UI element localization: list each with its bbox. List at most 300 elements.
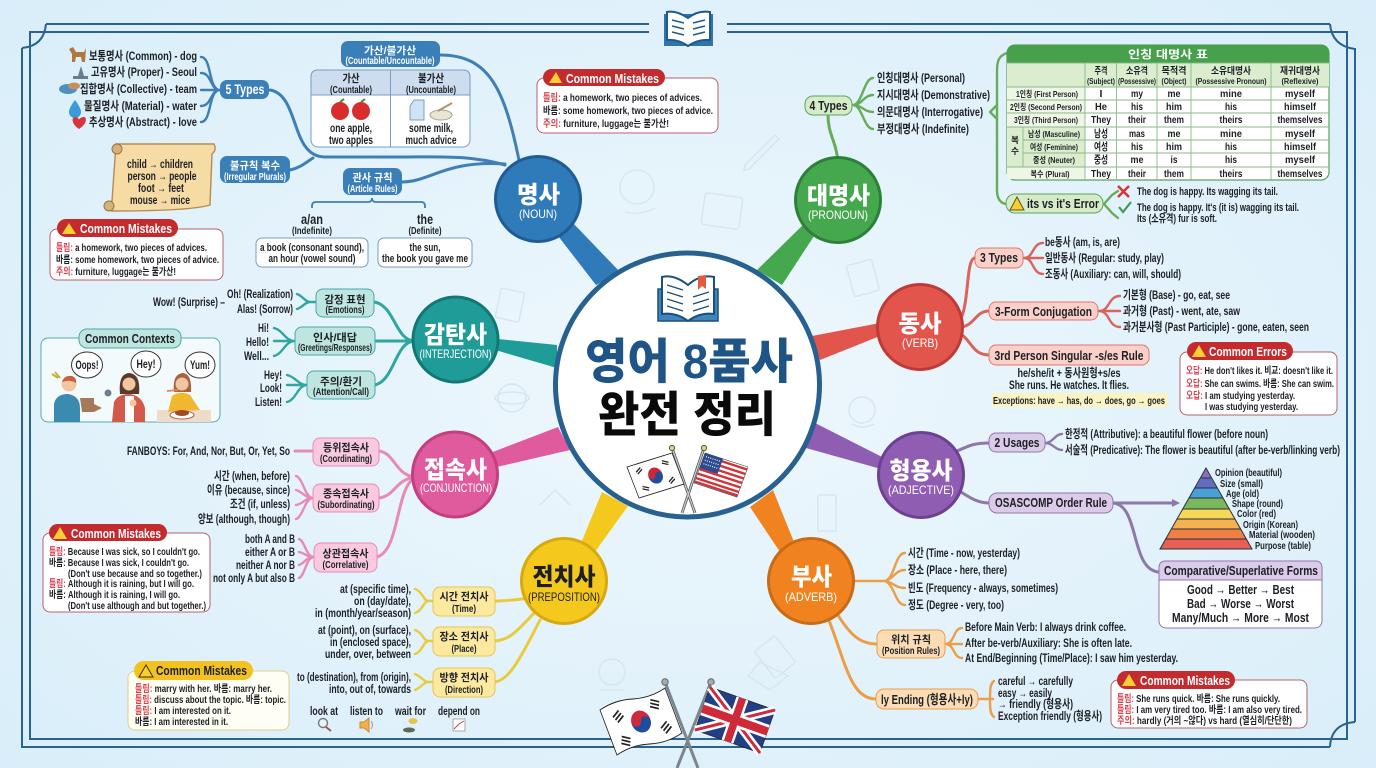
- pill: direction prepositions: (Direction): [445, 685, 483, 696]
- pronoun table values: his: [1131, 141, 1143, 153]
- node: pronoun: [796, 158, 880, 242]
- callout: conjunction common mistakes: 바름: Because I was sick, I couldn't go.: [49, 556, 189, 569]
- its vs it's examples: The dog is happy. Its wagging its tail.: [1137, 186, 1278, 198]
- conjunction examples: neither A nor B: [236, 558, 295, 572]
- pill: coordinating: [313, 438, 379, 466]
- callout: adverb common mistakes: 틀림: I am very tired too. 바름: I am also very tired.: [1117, 703, 1302, 716]
- chart: adjective order pyramid: Origin (Korean): [1243, 519, 1298, 531]
- title line 1: 영어 8품사: [585, 336, 793, 389]
- pill: position rules: [877, 630, 945, 658]
- callout: adverb common mistakes: [1111, 671, 1307, 728]
- pronoun table values: myself: [1285, 128, 1315, 140]
- callout: verb common errors: 오답: He don't likes it. 비교: doesn't like it.: [1186, 364, 1333, 377]
- its vs it's examples: [1104, 186, 1299, 225]
- scroll: irregular plural examples: child → children: [127, 157, 193, 171]
- pronoun table values: me: [1130, 154, 1144, 166]
- table: countable vs uncountable: two apples: [329, 133, 373, 147]
- panel: preposition branches: [128, 582, 540, 732]
- flags: Korea and USA: [627, 445, 748, 513]
- callout: top common mistakes: 바름: some homework, two pieces of advice.: [543, 104, 713, 117]
- conjunction examples: not only A but also B: [213, 571, 295, 585]
- pill: countable / uncountable: (Countable/Uncountable): [346, 56, 434, 67]
- panel: interjection branches: [41, 287, 415, 422]
- pill: subordinating: (Subordinating): [318, 500, 374, 511]
- pill: OSASCOMP: OSASCOMP Order Rule: [995, 495, 1107, 510]
- speech bubble: oops: Oops!: [76, 360, 98, 372]
- pronoun table values: themselves: [1278, 168, 1323, 180]
- pronoun table values: theirs: [1220, 114, 1243, 126]
- callout: top common mistakes: 틀림: a homework, two pieces of advices.: [543, 92, 702, 104]
- preposition examples: at (point), on (surface),: [318, 623, 411, 637]
- pill: irregular plurals: 불규칙 복수: [230, 159, 280, 172]
- node: preposition: 전치사: [532, 564, 596, 591]
- pill: place prepositions: (Place): [452, 644, 476, 655]
- pronoun table values: myself: [1285, 154, 1315, 166]
- chart: adjective order pyramid: Purpose (table): [1255, 540, 1311, 552]
- pronoun table values: him: [1166, 141, 1182, 153]
- article bracket and examples: (Definite): [408, 226, 442, 237]
- callout: verb common errors: 오답: She can swims. 바름: She can swim.: [1186, 377, 1334, 390]
- callout: conjunction common mistakes: 틀림: Although it is raining, but I will go.: [49, 578, 194, 590]
- interjection examples: Look!: [260, 381, 282, 395]
- pronoun type list: [877, 70, 990, 136]
- scroll: irregular plural examples: [104, 144, 215, 211]
- pill: 3-form conjugation: 3-Form Conjugation: [995, 304, 1092, 319]
- pronoun table values: me: [1168, 88, 1181, 100]
- callout: top common mistakes: Common Mistakes: [566, 71, 659, 86]
- chart: adjective order pyramid: Opinion (beautiful): [1215, 467, 1282, 479]
- adverb type list: 정도 (Degree - very, too): [908, 598, 1004, 612]
- conjunction examples: [127, 444, 295, 585]
- conjunction examples: 조건 (if, unless): [230, 497, 290, 511]
- conjunction examples: 양보 (although, though): [198, 512, 290, 526]
- pill: ly ending: [876, 689, 978, 709]
- preposition examples: [297, 582, 411, 696]
- callout: conjunction common mistakes: (Don't use although and but together.): [68, 601, 206, 612]
- pill: direction prepositions: [433, 668, 495, 697]
- noun 5 types list: 물질명사 (Material) - water: [84, 99, 197, 113]
- pronoun table values: my: [1131, 88, 1143, 100]
- conjunction examples: either A or B: [245, 545, 295, 559]
- icon: milk and flour: [410, 100, 452, 120]
- pronoun table values: mas: [1129, 128, 1145, 140]
- adverb position list: [965, 620, 1178, 665]
- callout: conjunction common mistakes: 바름: Although it is raining, I will go.: [49, 588, 180, 601]
- pill: ly ending: ly Ending (형용사+ly): [881, 692, 973, 707]
- node: noun: [496, 156, 580, 242]
- pill: correlative: 상관접속사: [322, 547, 369, 560]
- pill: correlative: (Correlative): [322, 560, 368, 571]
- table: countable vs uncountable: (Uncountable): [406, 85, 456, 96]
- faint background doodles: [495, 135, 880, 690]
- speech bubble: yum: [185, 352, 215, 378]
- table: personal pronouns: 3인칭 (Third Person): [1014, 115, 1078, 125]
- panel: common contexts: [41, 329, 220, 422]
- panel: common contexts: Common Contexts: [85, 331, 175, 346]
- callout: adverb common mistakes: 주의: hardly (거의 ~않다) vs hard (열심히/단단한): [1117, 714, 1292, 727]
- pronoun table values: me: [1168, 128, 1181, 140]
- conjugation list: 기본형 (Base) - go, eat, see: [1123, 287, 1230, 302]
- pronoun table values: themselves: [1278, 114, 1323, 126]
- callout: preposition common mistakes: 틀림: marry with her. 바름: marry her.: [135, 682, 272, 695]
- pill: time prepositions: [433, 587, 495, 616]
- pill: 3 Types: [975, 248, 1023, 268]
- table: personal pronouns: (Object): [1162, 77, 1187, 86]
- interjection examples: Hello!: [246, 335, 269, 349]
- pronoun type list: 부정대명사 (Indefinite): [877, 122, 969, 136]
- pill: 2 Usages: [989, 433, 1045, 452]
- panel: adjective branches: [955, 426, 1340, 628]
- conjunction examples: both A and B: [245, 532, 295, 546]
- pill: 3 Types: 3 Types: [980, 250, 1018, 265]
- chart: adjective order pyramid: Material (wooden): [1249, 529, 1315, 541]
- panel: comparative and superlative forms: [1159, 561, 1322, 628]
- scroll: irregular plural examples: person → people: [128, 169, 197, 183]
- pill: 3rd person singular rule: 3rd Person Singular -s/es Rule: [994, 348, 1144, 363]
- preposition examples: into, out of, towards: [329, 682, 411, 696]
- pronoun table values: himself: [1284, 101, 1316, 113]
- 3rd person rule text: She runs. He watches. It flies.: [1009, 378, 1129, 392]
- callout: verb common errors: I was studying yesterday.: [1205, 402, 1298, 413]
- node: verb: (VERB): [902, 336, 938, 350]
- table: personal pronouns: 남성 (Masculine): [1028, 129, 1080, 139]
- panel: noun branches: [50, 41, 520, 280]
- callout: preposition common mistakes: 틀림: discuss about the topic. 바름: topic.: [135, 693, 286, 706]
- adverb position list: Before Main Verb: I always drink coffee.: [965, 620, 1126, 634]
- article bracket and examples: a/an: [301, 212, 323, 227]
- interjection examples: Well...: [244, 349, 269, 363]
- speech bubble: yum: Yum!: [190, 360, 210, 372]
- callout: verb common errors: Common Errors: [1209, 344, 1287, 359]
- pill: irregular plurals: [220, 156, 290, 183]
- pronoun table values: his: [1225, 141, 1237, 153]
- node: adverb: 부사: [791, 564, 832, 591]
- adverb position list: At End/Beginning (Time/Place): I saw him yesterday.: [965, 651, 1178, 665]
- chart: adjective order pyramid: [1160, 467, 1315, 552]
- article bracket and examples: an hour (vowel sound): [268, 253, 356, 265]
- node: adverb: (ADVERB): [785, 590, 837, 604]
- pronoun table values: I: [1100, 88, 1103, 100]
- callout: noun common mistakes: 틀림: a homework, two pieces of advices.: [56, 242, 207, 254]
- ly ending examples: careful → carefully: [998, 674, 1073, 688]
- scroll: irregular plural examples: mouse → mice: [130, 193, 190, 207]
- node: adjective: (ADJECTIVE): [888, 483, 954, 497]
- table: countable vs uncountable: (Countable): [330, 85, 372, 96]
- interjection examples: Wow! (Surprise) –: [153, 295, 225, 309]
- table: countable vs uncountable: some milk,: [409, 121, 453, 135]
- conjugation list: [1123, 287, 1309, 334]
- spokes from centre to part-of-speech nodes: [472, 222, 892, 558]
- interjection examples: [153, 287, 293, 409]
- pill: greetings: 인사/대답: [313, 331, 357, 344]
- pronoun table values: They: [1091, 168, 1111, 180]
- node: adjective: 형용사: [890, 458, 952, 485]
- node: conjunction: 접속사: [424, 457, 487, 484]
- node: noun: 명사: [517, 182, 560, 209]
- pill: time prepositions: 시간 전치사: [440, 590, 489, 603]
- interjection examples: Hi!: [258, 321, 269, 335]
- article bracket and examples: [256, 198, 472, 267]
- pronoun table values: their: [1128, 114, 1146, 126]
- callout: adverb common mistakes: Common Mistakes: [1140, 673, 1230, 688]
- preposition examples: at (specific time),: [340, 582, 411, 596]
- callout: preposition common mistakes: Common Mistakes: [156, 663, 247, 678]
- node: pronoun: (PRONOUN): [808, 208, 868, 222]
- pill: OSASCOMP: [989, 493, 1113, 513]
- pill: subordinating: 종속접속사: [323, 487, 369, 500]
- callout: preposition common mistakes: 틀림: I am interested on it.: [135, 705, 231, 717]
- pill: position rules: 위치 규칙: [891, 633, 931, 646]
- ly ending examples: [998, 674, 1102, 723]
- noun 5 types list: 고유명사 (Proper) - Seoul: [91, 65, 197, 79]
- node: verb: [878, 284, 962, 370]
- noun 5 types list: 집합명사 (Collective) - team: [80, 81, 197, 96]
- node: preposition: [522, 538, 606, 624]
- article bracket and examples: the: [417, 212, 433, 227]
- verb type list: 일반동사 (Regular: study, play): [1045, 251, 1164, 265]
- pill: 2 Usages: 2 Usages: [994, 435, 1040, 450]
- node: interjection: 감탄사: [424, 322, 487, 349]
- pronoun table values: They: [1091, 114, 1111, 126]
- pill: article rules: [343, 168, 402, 195]
- ly ending examples: easy → easily: [998, 686, 1052, 700]
- table: personal pronouns: 중성 (Neuter): [1033, 155, 1075, 165]
- node: preposition: (PREPOSITION): [528, 590, 600, 604]
- pill: 3-form conjugation: [989, 302, 1098, 320]
- pronoun table values: mine: [1220, 128, 1242, 140]
- preposition examples: in (month/year/season): [315, 606, 411, 620]
- table: personal pronouns: 소유대명사: [1211, 65, 1251, 77]
- node: adjective: [878, 432, 964, 518]
- node: conjunction: (CONJUNCTION): [420, 481, 492, 495]
- table: personal pronouns: 2인칭 (Second Person): [1010, 102, 1082, 112]
- chart: adjective order pyramid: Age (old): [1226, 488, 1259, 500]
- table: countable vs uncountable: 불가산: [418, 71, 444, 85]
- central title circle: [556, 253, 820, 517]
- conjunction examples: 이유 (because, since): [207, 483, 290, 497]
- table: personal pronouns: (Possessive): [1118, 77, 1156, 86]
- adverb type list: [908, 546, 1058, 612]
- pill: article rules: 관사 규칙: [352, 171, 392, 184]
- icon: bottom flags Korea and UK: [599, 679, 775, 768]
- pronoun table values: myself: [1285, 88, 1315, 100]
- callout: conjunction common mistakes: (Don't use because and so together.): [68, 569, 202, 580]
- callout: noun common mistakes: 주의: furniture, luggage는 불가산!: [56, 265, 176, 278]
- node: pronoun: 대명사: [807, 183, 870, 210]
- pronoun table values: [1091, 88, 1323, 180]
- callout: adverb common mistakes: 틀림: She runs quick. 바름: She runs quickly.: [1117, 692, 1280, 705]
- conjugation list: 과거형 (Past) - went, ate, saw: [1123, 303, 1240, 318]
- callout: verb common errors: 오답: I am studying yesterday.: [1186, 389, 1295, 402]
- table: personal pronouns: 복: [1011, 135, 1019, 145]
- pronoun table values: his: [1225, 154, 1237, 166]
- node: conjunction: [412, 432, 498, 517]
- phrasal examples with icons: [310, 704, 480, 732]
- adjective usage list: 한정적 (Attributive): a beautiful flower (before noun): [1065, 426, 1268, 441]
- speech bubble: hey: Hey!: [136, 359, 156, 371]
- callout: noun common mistakes: [50, 219, 223, 280]
- pill: 4 Types: [805, 96, 852, 115]
- scroll: irregular plural examples: foot → feet: [138, 181, 184, 195]
- article bracket and examples: (Indefinite): [292, 226, 332, 237]
- table: personal pronouns: 여성 (Feminine): [1030, 142, 1078, 152]
- its vs it's examples: Its (소유격) fur is soft.: [1137, 212, 1217, 225]
- pronoun type list: 지시대명사 (Demonstrative): [877, 88, 990, 102]
- callout: noun common mistakes: 바름: some homework, two pieces of advice.: [56, 253, 219, 266]
- pronoun table values: 남성: [1094, 127, 1108, 140]
- pill: countable / uncountable: [341, 41, 440, 67]
- icon: top book: [664, 12, 713, 46]
- node: verb: 동사: [898, 311, 942, 338]
- table: countable vs uncountable: one apple,: [330, 121, 372, 135]
- pill: attention: (Attention/Call): [313, 387, 369, 398]
- pronoun table values: is: [1170, 154, 1178, 166]
- panel: adverb branches: [828, 546, 1307, 728]
- node: interjection: (INTERJECTION): [420, 347, 492, 361]
- person: hey: [104, 373, 145, 422]
- callout: preposition common mistakes: 바름: I am interested in it.: [135, 715, 228, 728]
- 3rd person rule text: Exceptions: have → has, do → does, go → goes: [993, 395, 1165, 407]
- pill: greetings: [295, 327, 375, 355]
- chart: adjective order pyramid: Shape (round): [1232, 498, 1283, 510]
- table: personal pronouns: 목적격: [1162, 65, 1186, 77]
- pronoun table values: their: [1128, 168, 1146, 180]
- preposition examples: to (destination), from (origin),: [297, 670, 411, 684]
- interjection examples: Hey!: [264, 368, 282, 382]
- table: personal pronouns: 1인칭 (First Person): [1016, 89, 1078, 99]
- pill: place prepositions: 장소 전치사: [440, 630, 489, 643]
- panel: comparative and superlative forms: Comparative/Superlative Forms: [1164, 563, 1318, 578]
- pill: attention: [307, 371, 375, 399]
- table: personal pronouns: 복수 (Plural): [1030, 169, 1070, 179]
- ly ending examples: Exception friendly (형용사): [998, 708, 1102, 723]
- panel: conjunction branches: [43, 438, 415, 612]
- panel: pronoun branches: [805, 45, 1329, 225]
- conjugation list: 과거분사형 (Past Participle) - gone, eaten, seen: [1123, 319, 1309, 334]
- panel: verb branches: [958, 235, 1337, 415]
- pronoun table values: them: [1164, 168, 1184, 180]
- interjection examples: Listen!: [255, 395, 282, 409]
- pill: its vs it's error: [1006, 194, 1103, 213]
- pill: 5 Types: 5 Types: [226, 82, 264, 97]
- table: countable vs uncountable: 가산: [342, 71, 360, 85]
- table: personal pronouns: (Possessive Pronoun): [1196, 77, 1267, 86]
- pronoun table values: He: [1095, 101, 1107, 113]
- pill: 5 Types: [220, 80, 269, 99]
- pill: coordinating: (Coordinating): [320, 454, 372, 465]
- interjection examples: Oh! (Realization): [227, 287, 293, 301]
- table: personal pronouns: [1007, 45, 1329, 180]
- pronoun type list: 의문대명사 (Interrogative): [877, 105, 983, 119]
- callout: noun common mistakes: Common Mistakes: [80, 221, 172, 236]
- node: adverb: [768, 538, 854, 624]
- person: oops: [52, 372, 102, 422]
- pill: subordinating: [313, 484, 379, 512]
- pill: irregular plurals: (Irregular Plurals): [224, 172, 286, 183]
- pronoun table values: his: [1131, 101, 1143, 113]
- 3rd person rule text: [992, 365, 1168, 407]
- pill: its vs it's error: its vs it's Error: [1027, 196, 1099, 211]
- pronoun table values: himself: [1284, 141, 1316, 153]
- preposition examples: on (day/date),: [354, 594, 411, 608]
- callout: preposition common mistakes: [128, 661, 289, 730]
- phrasal examples with icons: wait for: [394, 704, 426, 718]
- speech bubble: oops: [72, 352, 102, 378]
- phrasal examples with icons: listen to: [350, 704, 383, 718]
- adjective usage list: [1065, 426, 1340, 457]
- article bracket and examples: a book (consonant sound),: [260, 242, 364, 254]
- callout: verb common errors: [1180, 342, 1337, 415]
- pill: article rules: (Article Rules): [348, 184, 398, 195]
- adverb type list: 장소 (Place - here, there): [908, 563, 1007, 577]
- chart: adjective order pyramid: Color (red): [1237, 508, 1276, 520]
- pill: position rules: (Position Rules): [882, 646, 940, 657]
- callout: conjunction common mistakes: [43, 524, 210, 612]
- pronoun table values: his: [1225, 101, 1237, 113]
- table: personal pronouns: 수: [1011, 146, 1019, 156]
- article bracket and examples: the sun,: [410, 242, 440, 254]
- panel: comparative and superlative forms: Bad → Worse → Worst: [1187, 596, 1294, 611]
- table: countable vs uncountable: much advice: [406, 133, 457, 147]
- node: noun: (NOUN): [519, 207, 557, 221]
- pill: emotions: 감정 표현: [324, 293, 366, 306]
- icons: noun type examples: [59, 47, 88, 129]
- 3rd person rule text: he/she/it + 동사원형+s/es: [1018, 365, 1121, 380]
- noun 5 types list: 추상명사 (Abstract) - love: [89, 115, 197, 129]
- verb type list: [1045, 235, 1181, 281]
- table: personal pronouns: (Reflexive): [1282, 77, 1319, 86]
- table: personal pronouns: (Subject): [1087, 77, 1115, 86]
- title line 2: 완전 정리: [598, 389, 776, 442]
- phrasal examples with icons: look at: [310, 704, 338, 718]
- interjection examples: Alas! (Sorrow): [237, 302, 293, 316]
- its vs it's examples: The dog is happy. It's (it is) wagging its tail.: [1137, 202, 1299, 214]
- preposition examples: in (enclosed space),: [330, 635, 411, 649]
- pill: 3rd person singular rule: [989, 345, 1149, 365]
- pill: place prepositions: [433, 627, 495, 656]
- pronoun table values: 중성: [1094, 153, 1108, 166]
- callout: conjunction common mistakes: 틀림: Because I was sick, so I couldn't go.: [49, 546, 200, 558]
- pill: 4 Types: 4 Types: [810, 98, 848, 113]
- icon: apples: [331, 99, 370, 120]
- pronoun table values: them: [1164, 114, 1184, 126]
- pill: attention: 주의/환기: [320, 375, 362, 388]
- pronoun table values: 여성: [1094, 140, 1108, 153]
- article bracket and examples: the book you gave me: [382, 253, 468, 265]
- node: interjection: [413, 297, 498, 382]
- table: personal pronouns: 주격: [1094, 66, 1108, 77]
- adverb type list: 빈도 (Frequency - always, sometimes): [908, 581, 1058, 595]
- noun 5 types list: [80, 49, 197, 129]
- callout: conjunction common mistakes: Common Mistakes: [71, 526, 161, 541]
- ly ending examples: → friendly (형용사): [998, 696, 1073, 711]
- conjunction examples: FANBOYS: For, And, Nor, But, Or, Yet, So: [127, 444, 290, 458]
- person: yum: [157, 373, 211, 422]
- panel: comparative and superlative forms: Good → Better → Best: [1187, 582, 1295, 597]
- pronoun type list: 인칭대명사 (Personal): [877, 70, 965, 85]
- chart: adjective order pyramid: Size (small): [1220, 478, 1263, 490]
- pronoun table values: mine: [1220, 88, 1242, 100]
- callout: top common mistakes: 주의: furniture, luggage는 불가산!: [543, 117, 669, 130]
- pronoun table values: him: [1166, 101, 1182, 113]
- pill: time prepositions: (Time): [452, 604, 476, 615]
- pronoun table values: theirs: [1220, 168, 1243, 180]
- adverb position list: After be-verb/Auxiliary: She is often late.: [965, 636, 1132, 650]
- pill: greetings: (Greetings/Responses): [298, 343, 372, 354]
- table: personal pronouns: 인칭 대명사 표: [1128, 47, 1208, 61]
- verb type list: be동사 (am, is, are): [1045, 235, 1120, 249]
- table: personal pronouns: 소유격: [1126, 66, 1148, 77]
